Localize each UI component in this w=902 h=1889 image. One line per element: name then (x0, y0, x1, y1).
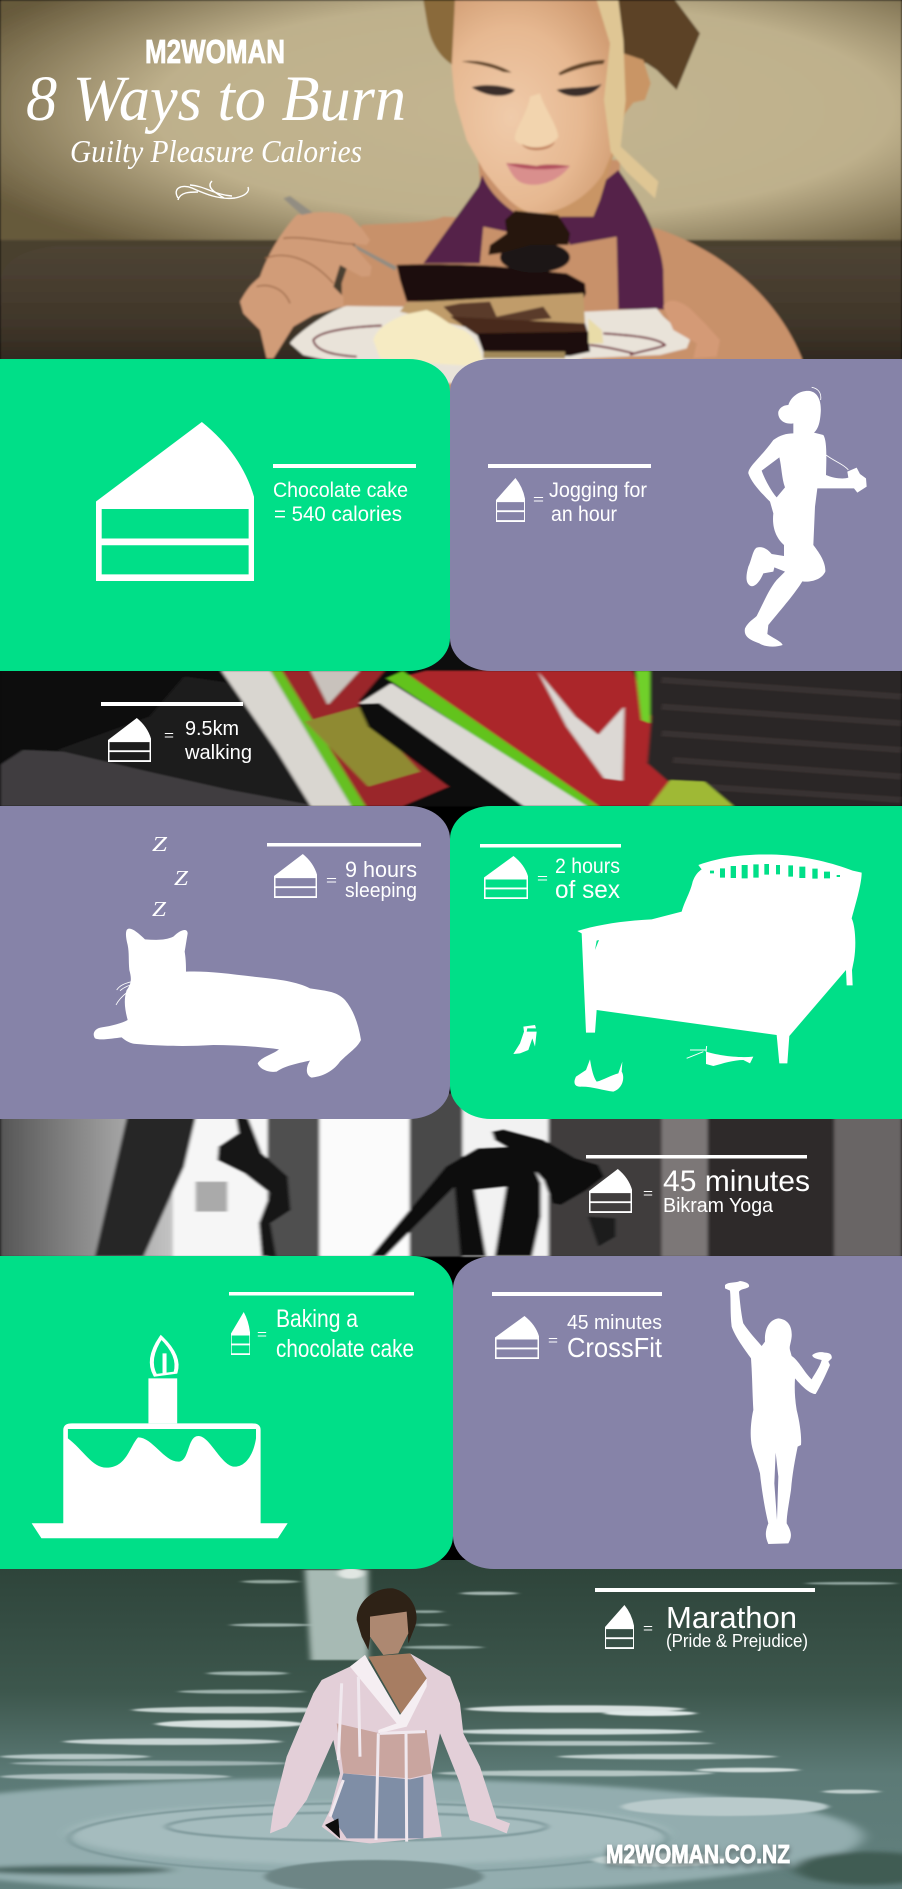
rule and label: crossfit (492, 1292, 662, 1363)
silhouette: woman with dumbbells (725, 1281, 832, 1544)
rule and label: sex (480, 844, 621, 904)
rule and label: crossfit: 45 minutes (567, 1312, 662, 1334)
panel: sleeping (0, 806, 450, 1119)
callout: marathon: (Pride & Prejudice) (666, 1631, 808, 1651)
callout: marathon: = (643, 1620, 653, 1636)
rule and label: sex: 2 hours (555, 855, 620, 878)
callout: walking: 9.5km (185, 718, 239, 740)
rule and label: baking: Baking a (276, 1305, 358, 1333)
logo: M2WOMAN (145, 33, 285, 70)
panel: sex (450, 806, 902, 1119)
rule and label: sex: = (537, 870, 548, 886)
panel: crossfit (453, 1256, 902, 1569)
rule and label: sleeping (267, 843, 421, 902)
silhouette: bed with clothes (513, 855, 862, 1092)
z letters: Z (174, 866, 188, 890)
footer logo: M2WOMAN.CO.NZ (606, 1839, 790, 1869)
panel: jogging (450, 359, 902, 671)
rule and label: jogging: = (533, 491, 544, 507)
z letters: Z (152, 832, 167, 856)
callout: bikram yoga: = (643, 1185, 653, 1201)
rule and label: sleeping: = (326, 872, 337, 888)
panel: chocolate cake (0, 359, 450, 671)
callout: bikram yoga: Bikram Yoga (663, 1195, 774, 1217)
callout: bikram yoga (586, 1155, 810, 1217)
callout: walking (101, 702, 252, 764)
subtitle: Guilty Pleasure Calories (70, 133, 362, 169)
photo: running shoes on treadmill (0, 640, 902, 807)
photo: yoga silhouettes (0, 1093, 902, 1257)
callout: walking: = (164, 727, 174, 743)
rule and label: jogging: Jogging for (549, 479, 647, 502)
panel: baking (0, 1256, 453, 1569)
callout: marathon: Marathon (666, 1600, 797, 1635)
rule and label: baking: = (257, 1326, 267, 1342)
callout: marathon (595, 1588, 815, 1651)
rule and label: sleeping: sleeping (345, 880, 417, 902)
z letters (152, 832, 188, 921)
photo: man wading in lake (0, 1560, 902, 1889)
z letters: Z (152, 897, 166, 921)
rule and label: jogging (488, 464, 651, 526)
callout: bikram yoga: 45 minutes (663, 1165, 810, 1198)
callout: walking: walking (184, 742, 252, 764)
decorative flourish (176, 181, 248, 200)
title: 8 Ways to Burn (26, 63, 406, 135)
rule and label: chocolate cake (273, 464, 416, 526)
rule and label: chocolate cake: Chocolate cake (273, 479, 408, 502)
silhouette: cat (94, 929, 361, 1078)
photo: woman eating chocolate cake (0, 0, 902, 408)
icon: birthday cake (32, 1337, 288, 1538)
rule and label: crossfit: = (548, 1332, 558, 1348)
rule and label: sex: of sex (555, 876, 620, 904)
rule and label: baking (229, 1292, 414, 1363)
icon: large cake slice (96, 422, 254, 581)
rule and label: sleeping: 9 hours (345, 857, 417, 882)
rule and label: jogging: an hour (551, 503, 617, 526)
rule and label: chocolate cake: = 540 calories (274, 503, 402, 526)
silhouette: runner (745, 387, 867, 647)
rule and label: crossfit: CrossFit (567, 1332, 662, 1363)
rule and label: baking: chocolate cake (276, 1335, 414, 1363)
